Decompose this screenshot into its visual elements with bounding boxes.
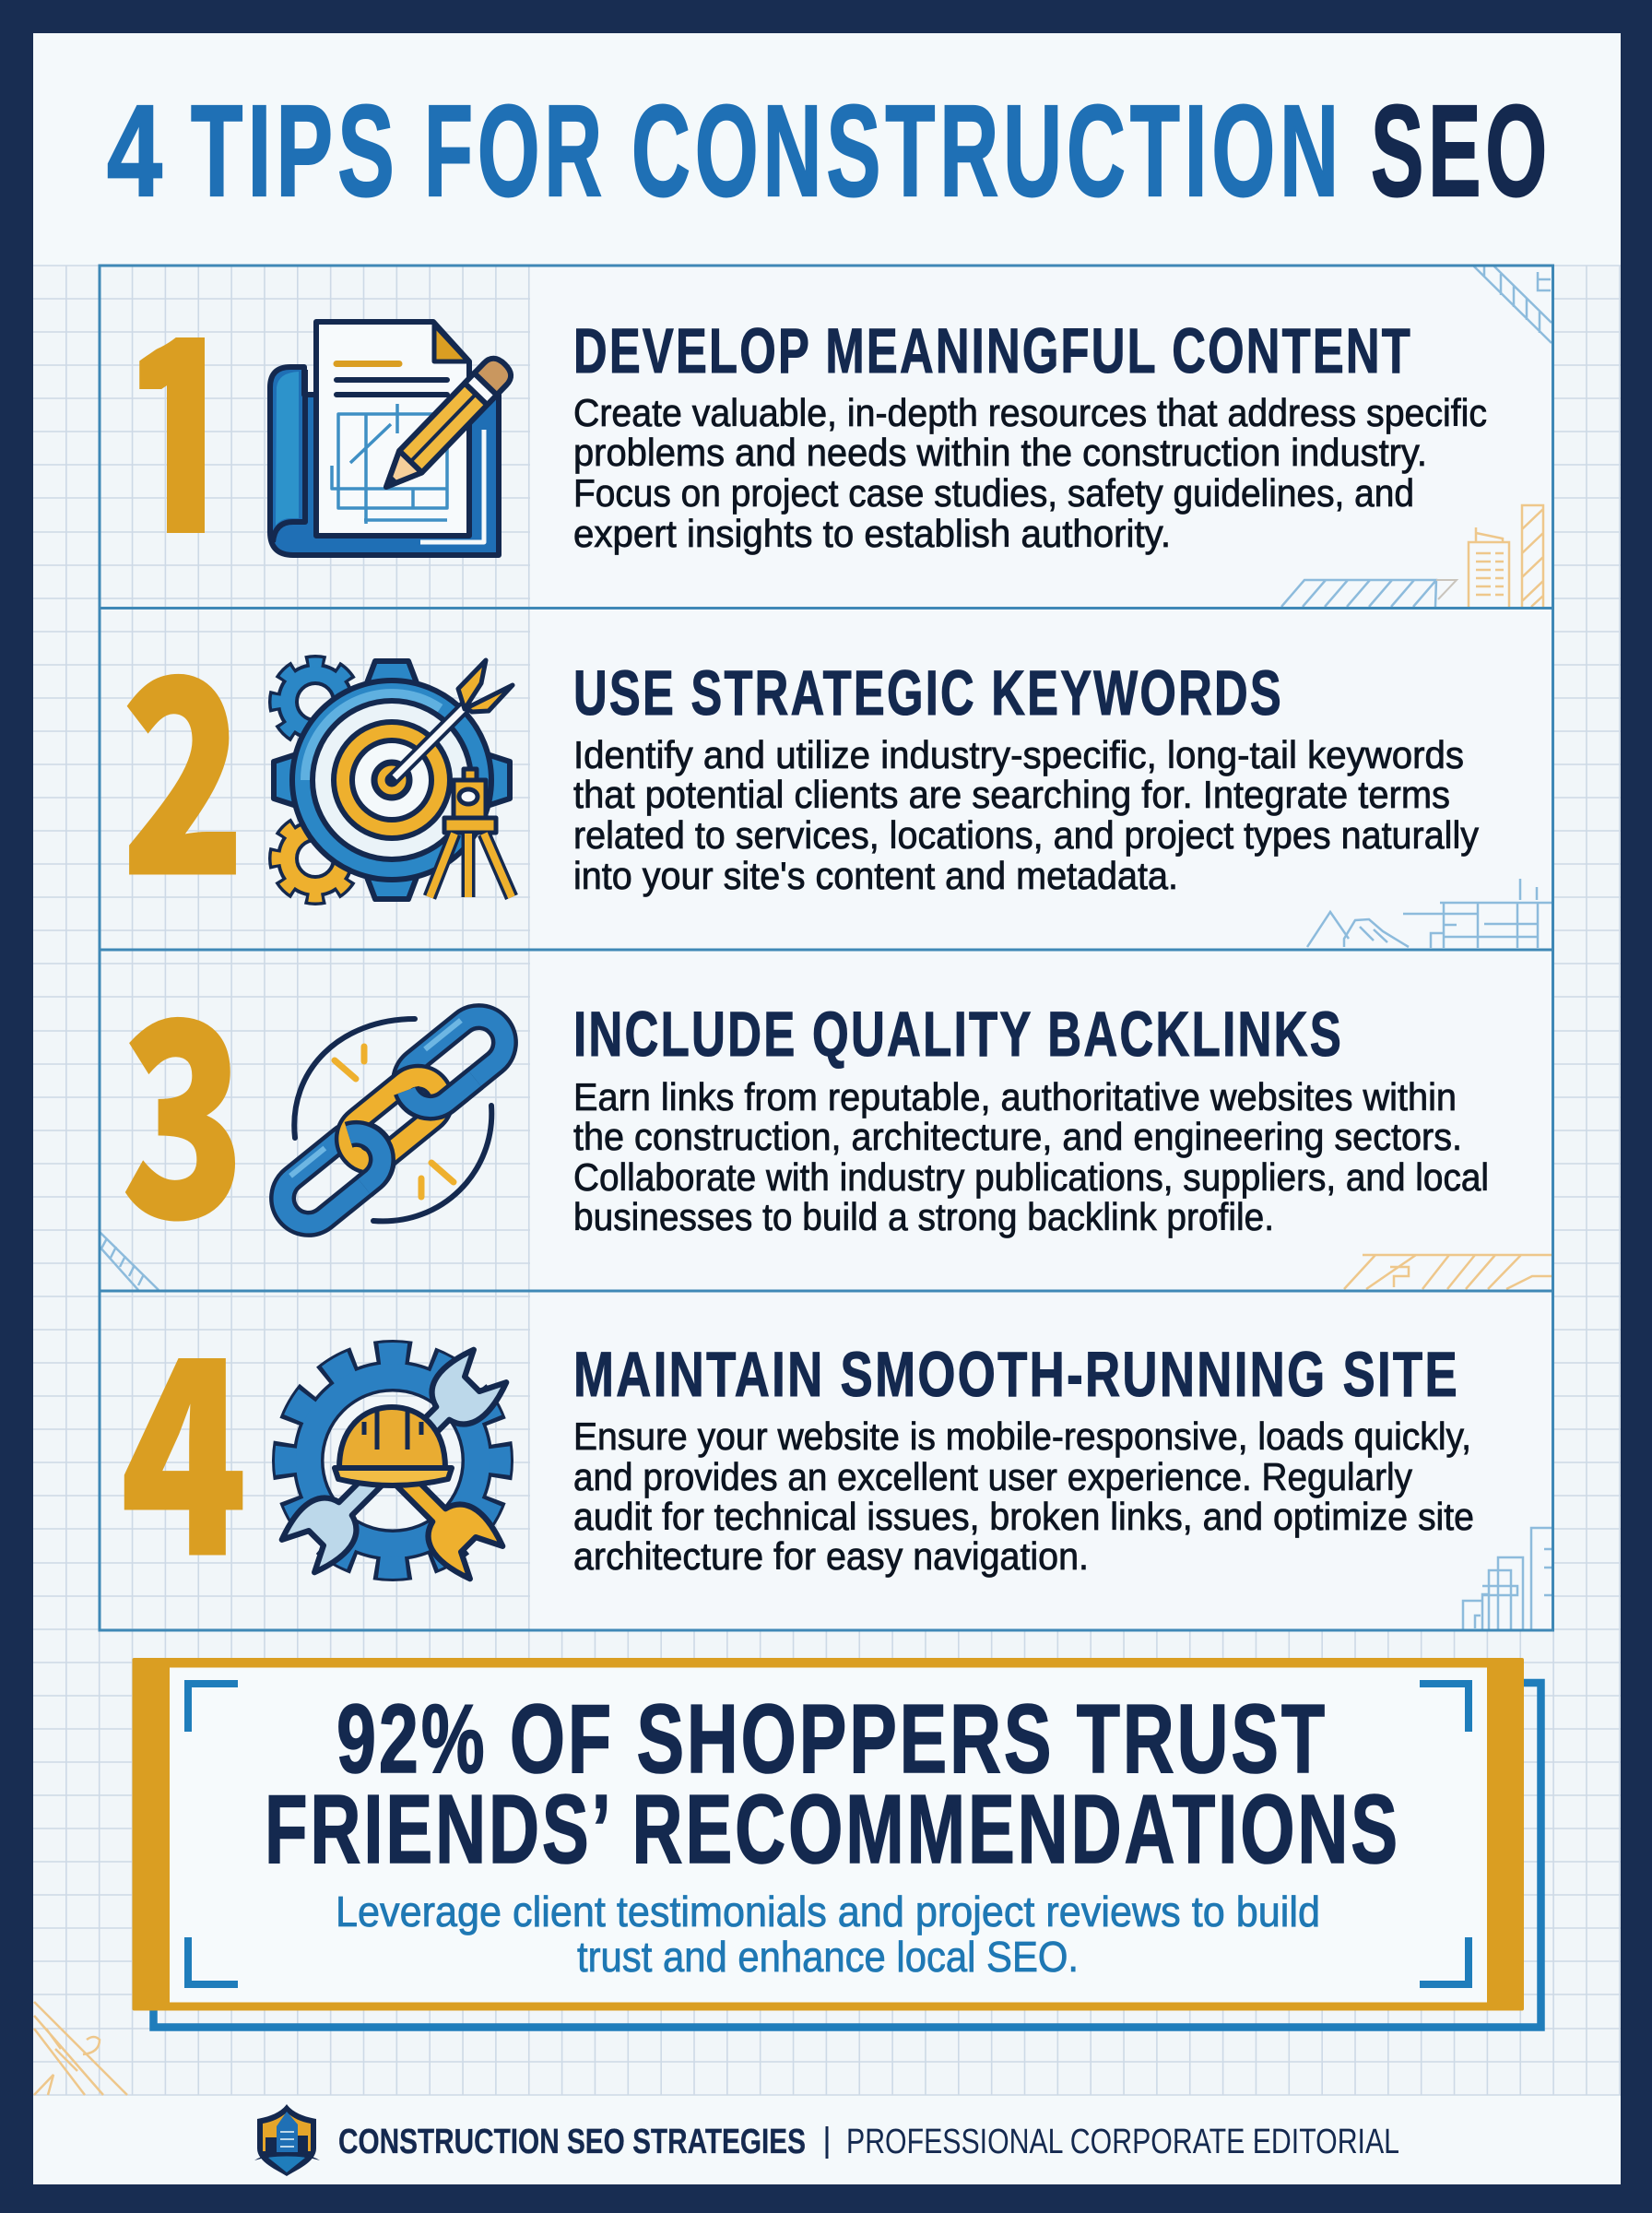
number 4: 4 (121, 1244, 247, 1631)
callout inner panel (170, 1667, 1487, 2003)
footer (254, 2104, 1399, 2176)
footer tagline: PROFESSIONAL CORPORATE EDITORIAL (846, 2123, 1399, 2161)
callout (133, 1658, 1541, 2027)
decorative sketch: scaffold row 3 left (100, 1232, 159, 1290)
corner brackets (188, 1684, 1469, 1984)
text column background (530, 266, 1553, 1630)
body text: problems and needs within the construction industry. (573, 431, 1427, 474)
callout subtext: Leverage client testimonials and project reviews to build (336, 1888, 1320, 1935)
panel: tips list (100, 223, 1553, 1631)
title: FOR (424, 77, 607, 223)
icon: gear, hard hat and wrenches (277, 1344, 512, 1584)
body text (573, 1414, 1474, 1578)
body text: that potential clients are searching for. Integrate terms (573, 773, 1450, 816)
heading: USE STRATEGIC KEYWORDS (573, 657, 1283, 728)
icon: shield logo (254, 2104, 320, 2176)
decorative sketch: buildings row 4 (1463, 1528, 1552, 1629)
tip 2 (122, 563, 1479, 951)
callout subtext (336, 1888, 1320, 1981)
body text: related to services, locations, and project types naturally (573, 813, 1479, 857)
gold frame (133, 1658, 1524, 2010)
title: TIPS (191, 77, 399, 223)
decorative sketch: plan row 3 right (1344, 1255, 1552, 1289)
number 2: 2 (122, 563, 245, 951)
icon: chain links (270, 1004, 515, 1235)
body text: Identify and utilize industry-specific, long-tail keywords (573, 733, 1464, 776)
decorative sketch: rubble and bricks row 2 (1307, 879, 1552, 948)
row dividers and border (100, 266, 1552, 1630)
decorative sketch: crane bottom left (34, 2002, 127, 2095)
title (107, 77, 1552, 223)
body text: Earn links from reputable, authoritative websites within (573, 1075, 1457, 1118)
title: 4 (107, 77, 168, 223)
tip 1 (139, 319, 1486, 558)
tip 3 (122, 906, 1489, 1294)
body text (573, 391, 1487, 555)
body text: Ensure your website is mobile-responsive, loads quickly, (573, 1414, 1471, 1458)
footer separator (826, 2126, 828, 2159)
decorative sketch: scaffold top right (1473, 266, 1552, 343)
body text: into your site's content and metadata. (573, 854, 1178, 897)
body text: and provides an excellent user experience. Regularly (573, 1455, 1412, 1498)
body text (573, 1075, 1489, 1238)
blueprint grid (33, 266, 1621, 2095)
body text: Collaborate with industry publications, suppliers, and local (573, 1155, 1489, 1199)
offset blue frame (153, 1683, 1541, 2027)
callout heading (265, 1685, 1400, 1884)
heading: INCLUDE QUALITY BACKLINKS (573, 999, 1343, 1070)
body text: the construction, architecture, and engineering sectors. (573, 1115, 1462, 1158)
icon: target gear, arrow and surveying tripod (274, 660, 513, 899)
number 3: 3 (122, 906, 245, 1294)
tip 4 (121, 1244, 1474, 1631)
callout subtext: trust and enhance local SEO. (577, 1933, 1079, 1981)
number 1: 1 (122, 223, 243, 610)
body text: architecture for easy navigation. (573, 1534, 1089, 1578)
body text: expert insights to establish authority. (573, 512, 1171, 555)
body text: Focus on project case studies, safety guidelines, and (573, 471, 1414, 515)
body text: audit for technical issues, broken links, and optimize site (573, 1495, 1474, 1538)
icon: blueprint page and pencil (270, 322, 516, 555)
footer brand: CONSTRUCTION SEO STRATEGIES (338, 2123, 806, 2161)
body text (573, 733, 1479, 897)
body text: businesses to build a strong backlink profile. (573, 1195, 1274, 1238)
body text: Create valuable, in-depth resources that address specific (573, 391, 1487, 434)
decorative sketch: hatch and buildings row 1 (1281, 505, 1543, 607)
